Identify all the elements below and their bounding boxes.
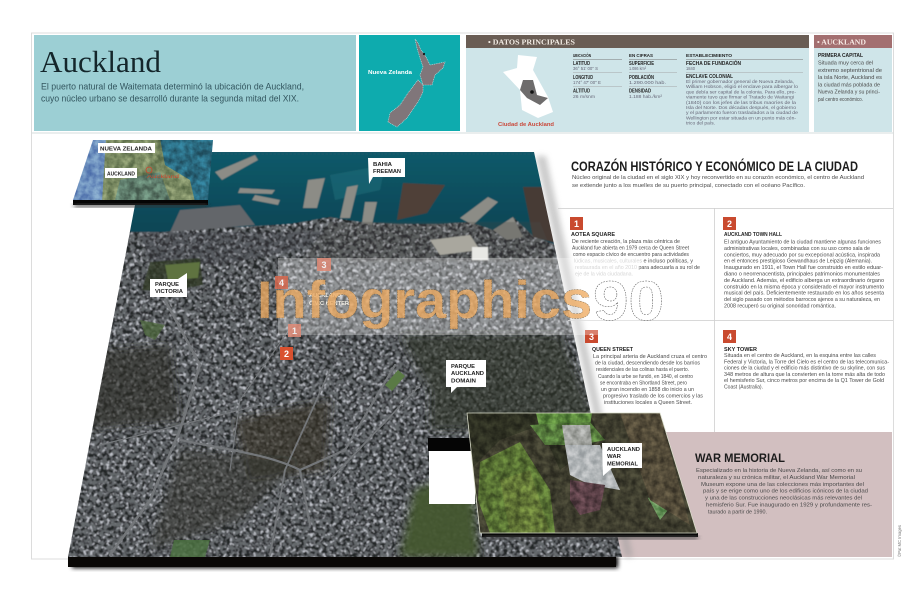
column: establecimiento: viamente tuvo que firmar el Tratado de Waitangi <box>686 95 794 100</box>
intro text: El puerto natural de Waitemata determinó la ubicación de Auckland, <box>41 82 304 92</box>
label: Parque Auckland Domain: DOMAIN <box>451 378 476 384</box>
column: establecimiento: El primer gobernador general de Nueva Zelanda, <box>686 79 794 84</box>
panel: title header <box>34 35 356 131</box>
column: en cifras: 1.290.000 hab. <box>629 80 666 85</box>
column: establecimiento: 1840 <box>686 66 695 71</box>
inset map: Nueva Zelanda <box>70 138 216 207</box>
block 2: Auckland Town Hall <box>723 217 884 310</box>
block 4: Sky Tower: 348 metros de altura que la convierten en la torre más alta de todo <box>724 372 885 378</box>
block 1: Aotea Square: para adecuarla a su rol de <box>637 265 700 271</box>
water: Waitemata harbour <box>130 150 556 245</box>
block 4: Sky Tower: 4 <box>727 332 732 342</box>
label: Auckland: AUCKLAND <box>107 172 135 178</box>
motorways <box>100 300 420 555</box>
section heading and intro: Núcleo original de la ciudad en el siglo XIX y hoy reconvertido en su corazón económico, el centro de Auckland <box>572 175 864 181</box>
panel: Auckland primera capital: la isla Norte, Auckland es <box>818 75 883 81</box>
column: establecimiento: ENCLAVE COLONIAL <box>686 74 734 80</box>
block 3: Queen Street: residenciales de las colinas hasta el puerto. <box>596 367 689 373</box>
map marker: 3: 3 <box>321 260 327 270</box>
column: establecimiento <box>686 53 803 126</box>
label: Parque Auckland Domain: PARQUE <box>451 364 475 370</box>
map marker: 2: 2 <box>284 349 289 359</box>
block 3: Queen Street: Cuando la urbe se fundó, en 1840, el centro <box>598 374 693 380</box>
column: en cifras: SUPERFICIE <box>629 61 654 67</box>
label: Auckland War Memorial: MEMORIAL <box>607 462 639 468</box>
block 3: Queen Street: progresivo traslado de los comercios y las <box>603 394 704 400</box>
block 2: Auckland Town Hall: AUCKLAND TOWN HALL <box>724 232 783 238</box>
watermark band <box>278 258 640 335</box>
block: War Memorial text: naturaleza y su crónica militar, el Auckland War Memorial <box>698 475 855 481</box>
section heading and intro <box>571 159 864 189</box>
column: en cifras: POBLACIÓN <box>629 73 654 81</box>
block: War Memorial text: Museum expone una de las colecciones más importantes del <box>701 482 864 488</box>
watermark: Infographics <box>257 271 592 330</box>
block 1: Aotea Square: lúdicas, musicales, culturales <box>574 258 643 264</box>
column: establecimiento: FECHA DE FUNDACIÓN <box>686 59 741 67</box>
block 2: Auckland Town Hall: 2008 recuperó su original sonoridad romántica. <box>724 304 836 310</box>
inset map: Nueva Zelanda: Auckland <box>147 174 180 179</box>
column: establecimiento: (1840) con los jefes de las tribus maoríes de la <box>686 100 797 105</box>
panel: Auckland primera capital: pal centro económico. <box>818 97 863 103</box>
block 1: Aotea Square: 1 <box>574 219 579 229</box>
label: Parque Auckland Domain <box>446 360 486 393</box>
credit: ©Pat MC Images <box>896 524 902 557</box>
panel: Auckland primera capital: extremo septentrional de <box>818 68 882 74</box>
building texture <box>60 205 630 560</box>
block: War Memorial text: país y se erige como uno de los edificios icónicos de la ciudad <box>703 489 868 495</box>
column: ubicacion: 174° 47' 00'' E <box>573 80 601 85</box>
column: ubicacion: LATITUD <box>573 61 590 67</box>
label: Auckland Civic Center: CIVIC CENTER <box>309 301 349 307</box>
label: Auckland War Memorial: WAR <box>607 454 621 460</box>
block 3: Queen Street: La principal arteria de Auckland cruza el centro <box>593 354 707 360</box>
block 3: Queen Street: 3 <box>589 332 594 342</box>
block 2: Auckland Town Hall: El antiguo Ayuntamiento de la ciudad mantiene algunas funciones <box>724 240 882 246</box>
map: Ciudad de Auckland: Ciudad de Auckland <box>498 122 555 128</box>
column: establecimiento: Isla del Norte. Dos décadas después, el gobierno <box>686 105 796 110</box>
block 2: Auckland Town Hall: de Auckland. Además, el edificio alberga un extraordinario órgano <box>724 278 884 284</box>
block: War Memorial text: taurado a partir de 1990. <box>708 509 767 515</box>
block: War Memorial text: hemisferio Sur. Fue inaugurado en 1929 y profundamente res- <box>706 502 872 508</box>
block 4: Sky Tower: Situada en el centro de Auckland, en la esquina entre las calles <box>724 353 877 359</box>
panel: datos principales <box>466 35 809 132</box>
block 4: Sky Tower: SKY TOWER <box>724 347 757 353</box>
panel: Auckland primera capital: Nueva Zelanda y su princi- <box>818 90 880 96</box>
block 3: Queen Street: instituciones locales a Queen Street. <box>604 400 692 406</box>
column: establecimiento: ESTABLECIMIENTO <box>686 53 732 59</box>
block 1: Aotea Square <box>570 217 700 278</box>
icon: North Island <box>415 39 445 85</box>
block 4: Sky Tower: Federal y Victoria, la Torre del Cielo es el centro de las telecomunica- <box>724 359 889 365</box>
column: ubicacion <box>573 51 622 99</box>
map marker: 2 <box>280 347 293 360</box>
block 3: Queen Street: se encontraba en Shortland Street, pero <box>600 380 687 386</box>
icon: South Island <box>388 80 423 127</box>
block 3: Queen Street: un gran incendio en 1858 dio inicio a un <box>601 387 694 393</box>
label: Auckland Civic Center <box>309 293 349 307</box>
map marker: 4 <box>275 276 288 289</box>
column: ubicacion: ALTITUD <box>573 88 590 94</box>
column: ubicacion: 26 m/snm <box>573 94 595 99</box>
column: en cifras: 1.188 hab./km² <box>629 94 662 99</box>
panel: Auckland primera capital: Situada muy cerca del <box>818 60 873 66</box>
column: establecimiento: que debía ser capital de la colonia. Para ello, pre- <box>686 89 796 94</box>
label: Auckland War Memorial <box>602 443 642 476</box>
panel: New Zealand locator map <box>359 35 460 131</box>
piers <box>170 155 556 243</box>
column: ubicacion: UBICACIÓN <box>573 51 591 59</box>
block 1: Aotea Square: e incluso políticas, y <box>642 258 694 264</box>
label: Nueva Zelanda: Nueva Zelanda <box>368 70 413 76</box>
block 2: Auckland Town Hall: conciertos, muy adecuado por su excepcional acústica, inspirada <box>724 252 880 258</box>
intro text <box>41 82 304 104</box>
label: Auckland War Memorial: AUCKLAND <box>607 447 640 453</box>
label: Nueva Zelanda <box>98 143 155 153</box>
map marker: 1: 1 <box>292 326 297 336</box>
block 3: Queen Street: de la ciudad, descendiendo desde los barrios <box>595 361 701 367</box>
panel: Auckland primera capital: la ciudad más poblada de <box>818 82 880 88</box>
label: Parque Auckland Domain: AUCKLAND <box>451 371 484 377</box>
block 1: Aotea Square: restaurada en el año 2010 <box>575 265 637 271</box>
column: en cifras: 1.086 km² <box>629 66 646 71</box>
block 1: Aotea Square: AOTEA SQUARE <box>571 232 615 238</box>
label: Nueva Zelanda: NUEVA ZELANDA <box>100 146 152 152</box>
column: en cifras: DENSIDAD <box>629 88 651 94</box>
block 2: Auckland Town Hall: 2 <box>727 219 732 229</box>
block 4: Sky Tower: Coast (Australia). <box>724 384 763 390</box>
label: Parque Victoria <box>150 273 187 297</box>
section heading and intro: se extiende junto a los muelles de su puerto principal, conectado con el océano Pacífico. <box>572 183 805 189</box>
water and harbour label: Bahia Freeman <box>368 158 405 184</box>
block: War Memorial text: y una de las construcciones neoclásicas más relevantes del <box>705 496 862 502</box>
column: establecimiento: y el parlamento fueron trasladados a la ciudad de <box>686 110 798 115</box>
title: Auckland <box>40 44 161 79</box>
heading: Auckland: • AUCKLAND <box>817 38 866 46</box>
map marker: 4: 4 <box>279 278 284 288</box>
water and harbour label: Bahia Freeman: BAHIA <box>373 162 392 168</box>
panel: Auckland primera capital <box>814 35 892 132</box>
block 1: Aotea Square: De reciente creación, la plaza más céntrica de <box>572 239 680 245</box>
heading: datos principales: • DATOS PRINCIPALES <box>488 38 575 46</box>
block 2: Auckland Town Hall: en el entonces prestigioso Gewandhaus de Leipzig (Alemania). <box>724 259 872 265</box>
column: establecimiento: trico del país. <box>686 121 715 126</box>
label: Parque Victoria: VICTORIA <box>155 289 183 295</box>
block 2: Auckland Town Hall: musical del país. Deficientemente restaurado en los años sesenta <box>724 291 884 297</box>
map marker: 1 <box>288 324 301 337</box>
column: en cifras: EN CIFRAS <box>629 53 654 59</box>
main map: aerial view of central Auckland <box>60 150 630 568</box>
map marker: 3 <box>317 258 331 271</box>
panel: War Memorial background <box>613 432 892 557</box>
label: Auckland Civic Center: AUCKLAND <box>309 293 341 299</box>
block 2: Auckland Town Hall: diano o neorrenacentista, principales patrimonios monumentales <box>724 272 881 278</box>
park: Victoria <box>142 258 203 292</box>
block 1: Aotea Square: eje de la vida ciudadana. <box>575 272 633 278</box>
urban shading <box>140 232 330 265</box>
intro text: cuyo núcleo urbano se desarrolló durante la segunda mitad del XIX. <box>41 94 299 104</box>
column: ubicacion: 36° 51' 00'' S <box>573 66 598 71</box>
block 2: Auckland Town Hall: administrativas locales, combinadas con su uso como sala de <box>724 246 870 252</box>
label: Parque Victoria: PARQUE <box>155 282 179 288</box>
block 3: Queen Street: QUEEN STREET <box>592 347 634 353</box>
text grid rules <box>558 208 893 432</box>
block 4: Sky Tower: ciones de la ciudad y el edificio más distintivo de su skyline, con sus <box>724 366 886 372</box>
block 1: Aotea Square: como espacio cívico de encuentro para actividades <box>573 252 690 258</box>
label: Auckland <box>105 168 137 178</box>
district shading <box>85 335 600 557</box>
block: War Memorial text: WAR MEMORIAL <box>695 451 785 465</box>
block 2: Auckland Town Hall: construido en la misma época y considerado el mayor instrumento <box>724 284 884 290</box>
watermark: 90 <box>593 269 664 332</box>
block 2: Auckland Town Hall: Inaugurado en 1911, el Town Hall fue construido en estilo eduar- <box>724 265 883 271</box>
column: en cifras <box>629 53 677 99</box>
column: establecimiento: William Hobson, eligió el enclave para albergar lo <box>686 84 798 89</box>
column: establecimiento: Wellington por estar situada en un punto más cén- <box>686 115 796 120</box>
block 2: Auckland Town Hall: del siglo pasado con métodos barrocos ajenos a su naturaleza, en <box>724 297 880 303</box>
section heading and intro: CORAZÓN HISTÓRICO Y ECONÓMICO DE LA CIUDAD <box>571 159 858 174</box>
water and harbour label: Bahia Freeman: FREEMAN <box>373 169 401 175</box>
map: Ciudad de Auckland <box>498 55 555 128</box>
block 4: Sky Tower <box>723 330 889 390</box>
inset map: War Memorial <box>460 410 700 539</box>
panel: Auckland primera capital: PRIMERA CAPITAL <box>818 53 864 59</box>
column: ubicacion: LONGITUD <box>573 75 593 81</box>
block: War Memorial text <box>695 451 872 515</box>
block 4: Sky Tower: el hemisferio Sur, cinco metros por encima de la Q1 Tower de Gold <box>724 378 884 384</box>
map shadow on right edge <box>536 156 633 557</box>
block 3: Queen Street <box>585 330 707 406</box>
white cut-out behind inset <box>428 438 475 504</box>
block: War Memorial text: Especializado en la historia de Nueva Zelanda, así como en su <box>696 468 862 474</box>
block 1: Aotea Square: Auckland fue abierta en 1979 cerca de Queen Street <box>572 246 690 252</box>
